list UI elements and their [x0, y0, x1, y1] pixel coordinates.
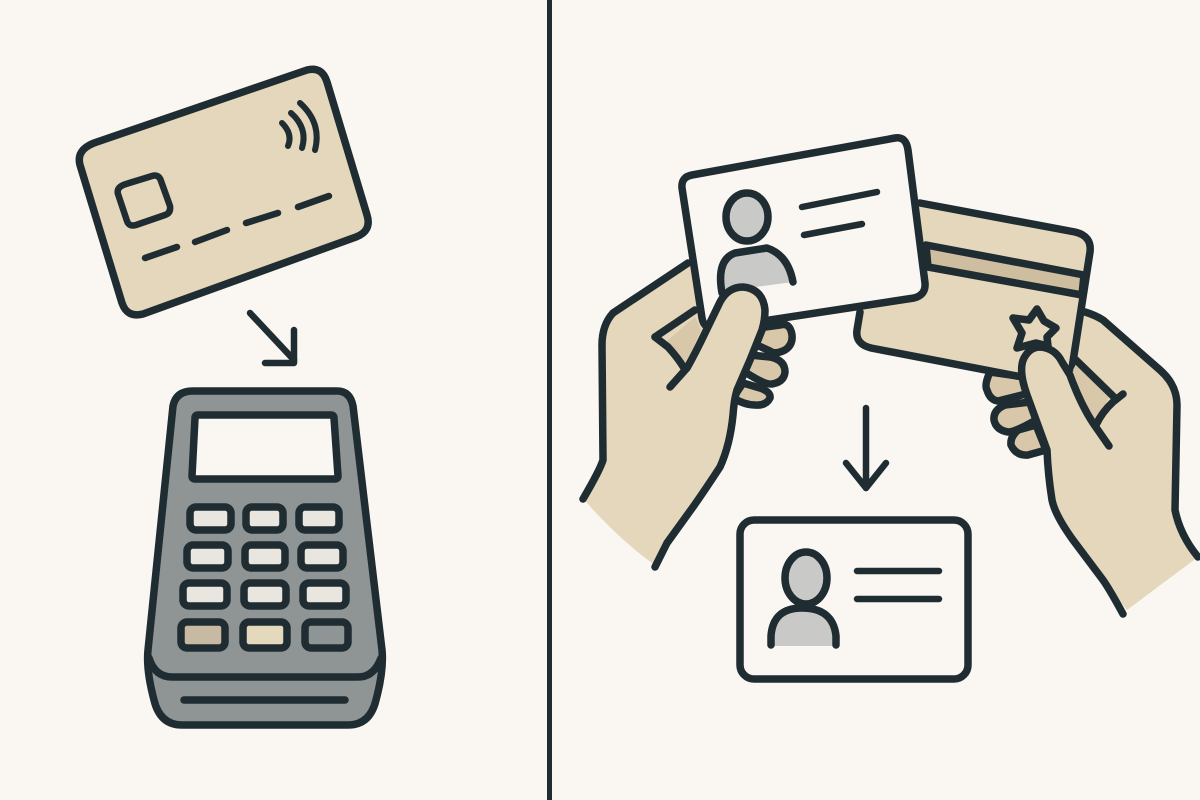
card number dashes	[145, 196, 329, 258]
keypad	[181, 507, 348, 648]
icon: loyalty card	[857, 200, 1090, 377]
icon: left thumb	[655, 287, 765, 567]
magnetic stripe	[926, 245, 1084, 295]
icon: right hand back fingers	[986, 372, 1046, 455]
ID text lines	[802, 192, 877, 207]
divider	[547, 0, 552, 800]
panel: ID card in hands	[583, 138, 1198, 679]
portrait body	[721, 248, 793, 293]
card slot	[184, 696, 345, 704]
icon: resulting ID card	[740, 520, 968, 679]
icon: payment terminal	[148, 391, 382, 725]
ID text lines	[857, 568, 939, 574]
arrow: down to ID card	[846, 408, 886, 488]
icon: payment card	[79, 69, 368, 315]
terminal screen	[192, 415, 338, 479]
icon: left hand palm	[583, 263, 763, 567]
card chip	[118, 176, 170, 226]
icon: left hand back fingers	[733, 324, 792, 405]
panel: contactless payment	[79, 69, 382, 725]
portrait body	[771, 608, 836, 646]
portrait head	[726, 193, 768, 241]
icon: right thumb	[1022, 347, 1123, 614]
arrow: card to terminal	[250, 313, 294, 363]
contactless waves	[282, 103, 317, 150]
left hand inner fold	[667, 317, 701, 365]
icon: right hand palm	[1020, 312, 1198, 610]
icon: ID card held	[682, 138, 925, 328]
star	[1013, 309, 1056, 348]
portrait head	[785, 552, 827, 604]
terminal base line	[149, 658, 381, 677]
